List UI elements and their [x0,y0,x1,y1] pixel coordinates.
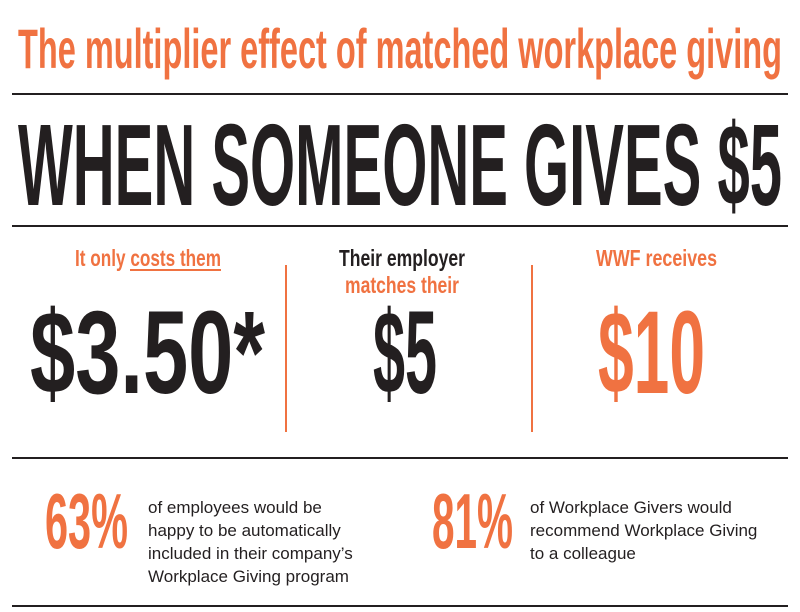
column: costs: $3.50* [30,287,265,419]
stat: 63%: of employees would be [148,498,322,517]
column: employer [339,245,465,419]
column: WWF [596,245,717,419]
column: employer: Their employer [339,245,465,271]
column: WWF: $10 [598,287,705,419]
column: costs: It only costs them [75,245,221,271]
divider [531,265,533,432]
stat: 81% [432,477,762,565]
divider [285,265,287,432]
stat: 63%: happy to be automatically [148,521,341,540]
stat: 81%: to a colleague [530,544,636,563]
column: costs [30,245,265,419]
stat: 63%: included in their company’s [148,544,353,563]
stat: 63%: Workplace Giving program [148,567,349,586]
stat: 63%: 63% [45,477,128,565]
stat: 81%: recommend Workplace Giving [530,521,757,540]
stat: 81%: 81% [432,477,513,565]
column: employer: $5 [373,287,437,419]
stat: 81%: of Workplace Givers would [530,498,732,517]
column: WWF: WWF receives [596,245,717,271]
stat: 63% [45,477,357,586]
column: employer: matches their [345,272,459,298]
